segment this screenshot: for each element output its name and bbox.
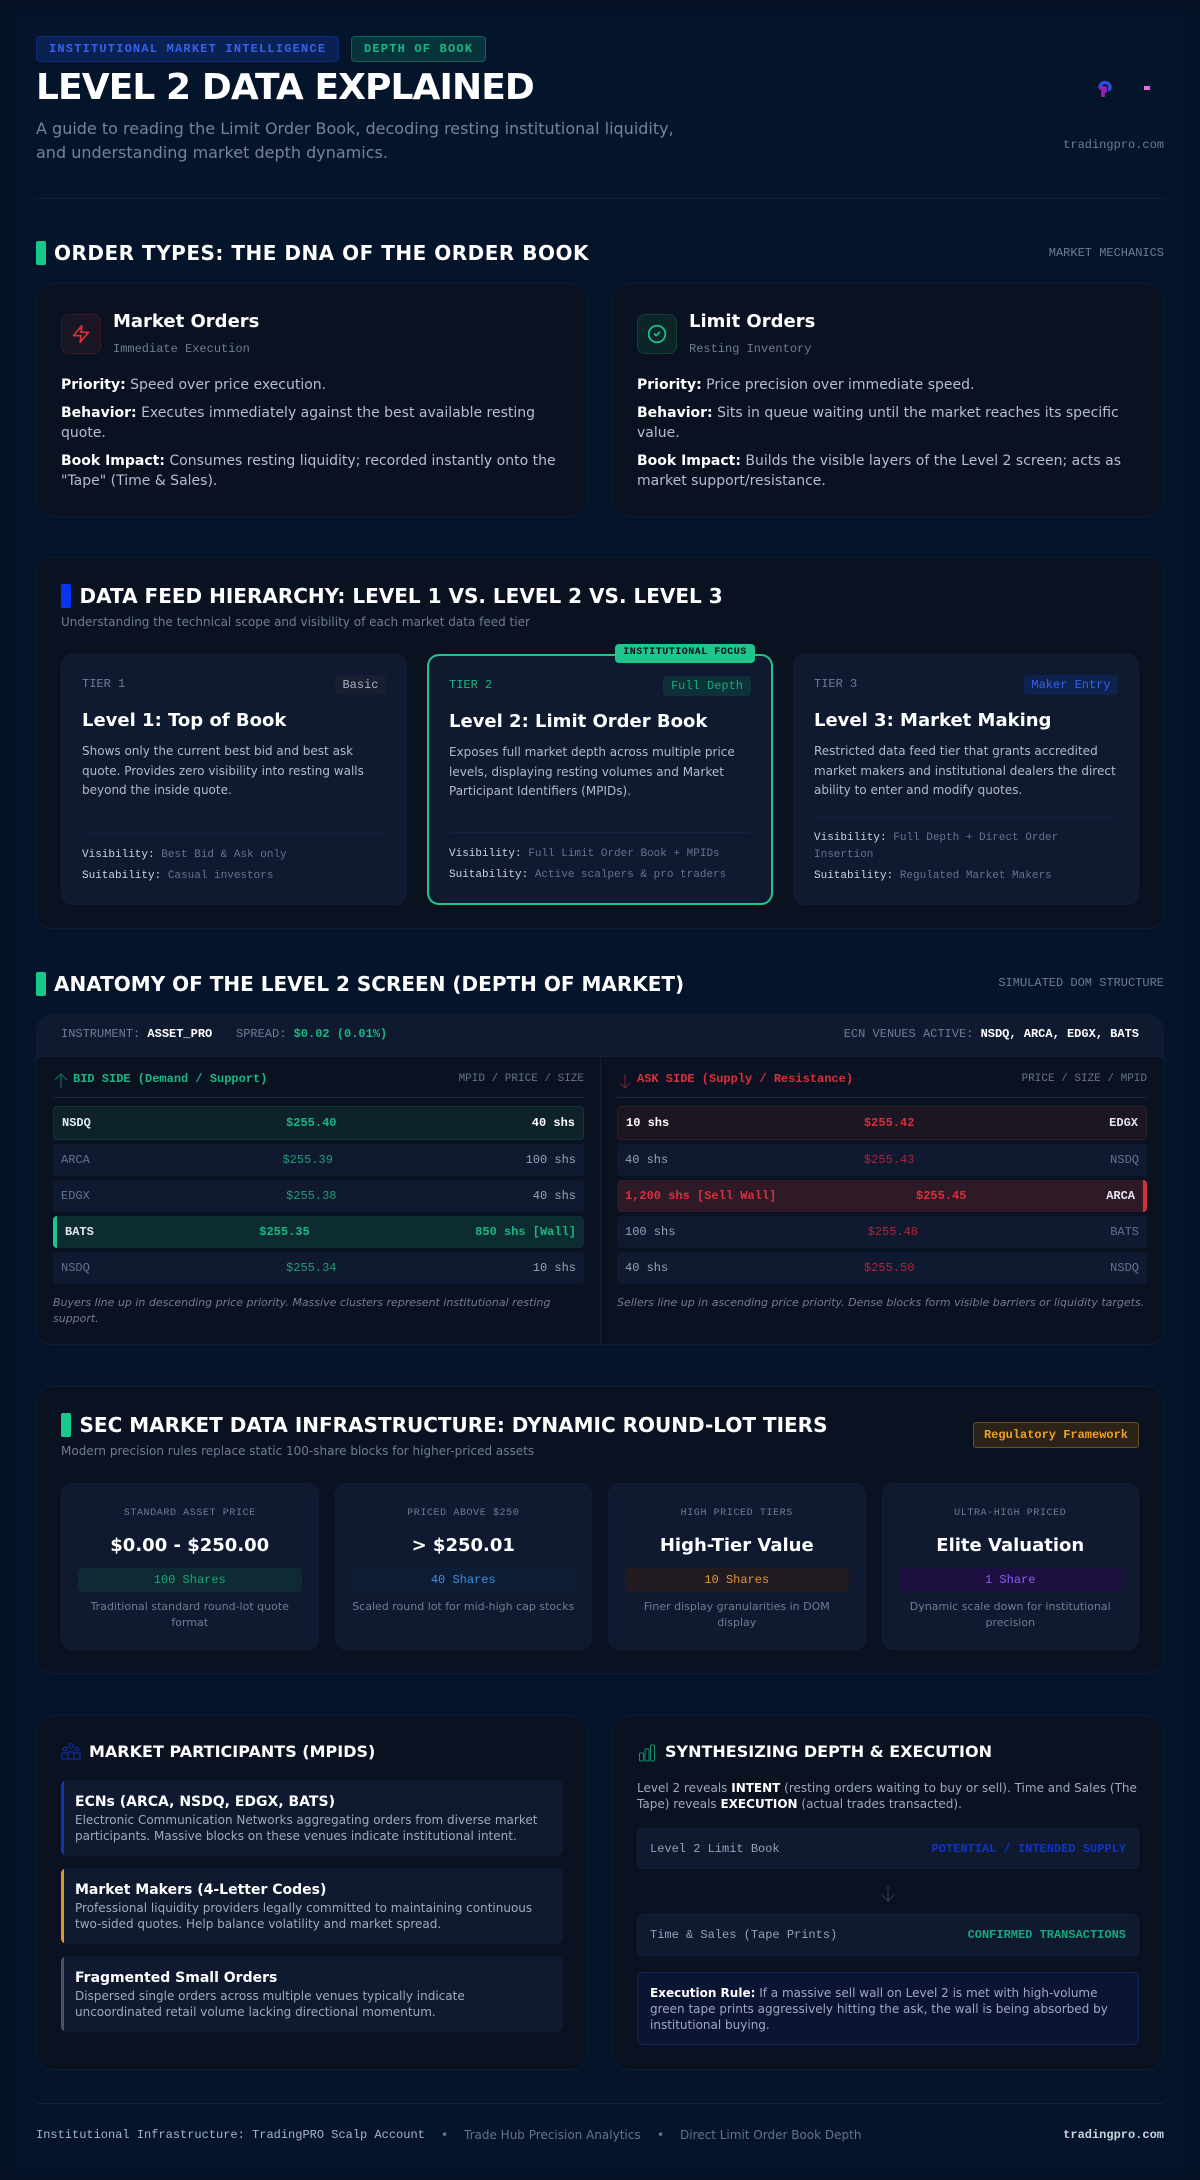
card subtitle: Resting Inventory (689, 342, 811, 356)
bid rows: 40 shs (532, 1116, 575, 1130)
panel: market orders: Behavior: Executes immediately against the best available resting (61, 405, 535, 421)
card: tier 2 (427, 654, 773, 905)
card: tier 1: Basic (342, 678, 378, 692)
card: ultra high: ULTRA-HIGH PRICED (954, 1508, 1066, 1519)
icon: check circle (637, 314, 677, 354)
card: tier 1: Visibility: Best Bid & Ask only (82, 849, 287, 861)
ask side: 40 shs (625, 1261, 668, 1275)
card: tier 3: Restricted data feed tier that grants accredited (814, 744, 1098, 758)
panel: market orders: Priority: Speed over price execution. (61, 377, 326, 393)
item: ecns: ECNs (ARCA, NSDQ, EDGX, BATS) (75, 1794, 335, 1810)
panel: depth of market (36, 1014, 1164, 1345)
ask side: PRICE / SIZE / MPID (1022, 1073, 1147, 1085)
panel: limit orders: Priority: Price precision over immediate speed. (637, 377, 974, 393)
ask rows: EDGX (1109, 1116, 1138, 1130)
bid side: BID SIDE (Demand / Support) (73, 1072, 267, 1086)
card: standard: Traditional standard round-lot quote (91, 1600, 289, 1613)
badge: institutional market intelligence (36, 36, 339, 62)
card: high tier: HIGH PRICED TIERS (681, 1508, 793, 1519)
card: tier 2: Suitability: Active scalpers & pro traders (449, 869, 726, 881)
card: tier 3 (793, 654, 1139, 905)
subtitle: A guide to reading the Limit Order Book, decoding resting institutional liquidity, (36, 119, 674, 138)
panel: market orders (36, 283, 588, 517)
title: LEVEL 2 DATA EXPLAINED (36, 67, 534, 108)
panel: limit orders: market support/resistance. (637, 473, 826, 489)
bid side: 850 shs [Wall] (475, 1225, 576, 1239)
bid side: 40 shs (533, 1189, 576, 1203)
card: tier 2: levels, displaying resting volumes and Market (449, 764, 724, 778)
ask side: NSDQ (1110, 1261, 1139, 1275)
item: fragmented orders: Fragmented Small Orders (75, 1970, 277, 1986)
card: tier 3: Level 3: Market Making (814, 710, 1051, 731)
subheading: Understanding the technical scope and visibility of each market data feed tier (61, 615, 530, 629)
ask rows: 10 shs (626, 1116, 669, 1130)
section heading: order types (36, 241, 1164, 265)
bid side: $255.39 (282, 1153, 333, 1167)
card: tier 1: beyond the inside quote. (82, 783, 232, 797)
panel: market orders: "Tape" (Time & Sales). (61, 473, 217, 489)
badge: regulatory framework (973, 1422, 1139, 1448)
section heading: anatomy: SIMULATED DOM STRUCTURE (998, 976, 1164, 990)
bid note: support. (53, 1312, 99, 1325)
item: ecns: Electronic Communication Networks aggregating orders from diverse market (75, 1813, 537, 1827)
card title: Market Orders (113, 311, 259, 332)
card: above 250: 40 Shares (431, 1573, 496, 1587)
bid side: 10 shs (533, 1261, 576, 1275)
card: tier 2: Participant Identifiers (MPIDs). (449, 784, 631, 798)
callout: execution rule (637, 1972, 1139, 2045)
card: high tier (608, 1483, 866, 1650)
callout: execution rule: green tape prints aggressively hitting the ask, the wall is being absorbed by (650, 2002, 1108, 2016)
icon: logo mark (1098, 80, 1112, 97)
card: above 250: PRICED ABOVE $250 (407, 1508, 519, 1519)
card: standard: format (171, 1616, 208, 1629)
callout: execution rule: Execution Rule: If a massive sell wall on Level 2 is met with high-volume (650, 1986, 1098, 2000)
panel: market participants (36, 1715, 588, 2070)
ask side: $255.45 (916, 1189, 966, 1203)
card: ultra high: Elite Valuation (936, 1535, 1084, 1556)
card: standard: STANDARD ASSET PRICE (124, 1508, 256, 1519)
card: tier 3: Suitability: Regulated Market Makers (814, 870, 1052, 882)
card: high tier: display (717, 1616, 756, 1629)
panel: market orders: quote. (61, 425, 106, 441)
heading: SYNTHESIZING DEPTH & EXECUTION (665, 1742, 992, 1761)
ask side: $255.48 (868, 1225, 918, 1239)
bid side: BATS (65, 1225, 94, 1239)
card: above 250 (334, 1483, 592, 1650)
ask side: 40 shs (625, 1153, 668, 1167)
item: fragmented orders (61, 1956, 563, 2032)
flow: time and sales: Time & Sales (Tape Prints) (650, 1928, 837, 1942)
bid rows (53, 1106, 584, 1140)
bid side: $255.34 (286, 1261, 336, 1275)
footer: tradingpro.com (1063, 2128, 1164, 2142)
icon: lightning (61, 314, 101, 354)
subheading: Modern precision rules replace static 100-share blocks for higher-priced assets (61, 1444, 534, 1458)
badge: institutional focus (615, 644, 755, 663)
icon: people (62, 1743, 80, 1760)
card: tier 1: quote. Provides zero visibility into resting walls (82, 764, 364, 778)
heading: MARKET PARTICIPANTS (MPIDS) (89, 1742, 375, 1761)
intro text: Tape) reveals EXECUTION (actual trades transacted). (637, 1797, 962, 1811)
bid side: 100 shs (526, 1153, 576, 1167)
icon: arrow down (620, 1074, 630, 1089)
item: fragmented orders: uncoordinated retail volume lacking directional momentum. (75, 2005, 436, 2019)
icon: arrow up (54, 1073, 68, 1088)
flow: level 2 limit book: POTENTIAL / INTENDED SUPPLY (932, 1842, 1126, 1856)
bid side: $255.38 (286, 1189, 336, 1203)
panel: limit orders: Book Impact: Builds the visible layers of the Level 2 screen; acts as (637, 453, 1121, 469)
item: market makers: Market Makers (4-Letter Codes) (75, 1882, 326, 1898)
header (36, 36, 1164, 162)
card: above 250: Scaled round lot for mid-high cap stocks (352, 1600, 574, 1613)
instrument bar: INSTRUMENT: ASSET_PRO (61, 1027, 212, 1041)
bid side: EDGX (61, 1189, 90, 1203)
section heading: order types: MARKET MECHANICS (1049, 246, 1164, 260)
heading: SEC MARKET DATA INFRASTRUCTURE: DYNAMIC ROUND-LOT TIERS (80, 1413, 827, 1437)
ask side: NSDQ (1110, 1153, 1139, 1167)
card: tier 3: Maker Entry (1031, 678, 1111, 692)
bid side: $255.35 (259, 1225, 310, 1239)
card: tier 3: Insertion (814, 849, 873, 861)
ask side: $255.43 (864, 1153, 914, 1167)
ask side: BATS (1110, 1225, 1139, 1239)
badge: institutional focus: INSTITUTIONAL FOCUS (623, 647, 747, 658)
card: tier 3: ability to enter and modify quotes. (814, 783, 1022, 797)
card: tier 2: TIER 2 (449, 678, 492, 692)
card: high tier: 10 Shares (704, 1573, 769, 1587)
ask rows (617, 1106, 1147, 1140)
footer: • (441, 2128, 448, 2142)
panel: synthesizing depth and execution (612, 1715, 1164, 2070)
bid side: MPID / PRICE / SIZE (459, 1073, 584, 1085)
card: tier 2: Level 2: Limit Order Book (449, 711, 707, 732)
card: tier 3: Visibility: Full Depth + Direct Order (814, 832, 1058, 844)
section heading: order types: ORDER TYPES: THE DNA OF THE ORDER BOOK (54, 241, 589, 265)
instrument bar (36, 1014, 1164, 1057)
badge: institutional market intelligence: INSTITUTIONAL MARKET INTELLIGENCE (49, 42, 326, 56)
card: standard: 100 Shares (154, 1573, 226, 1587)
card: ultra high (882, 1483, 1139, 1650)
card subtitle: Immediate Execution (113, 342, 250, 356)
instrument bar: ECN VENUES ACTIVE: NSDQ, ARCA, EDGX, BATS (844, 1027, 1139, 1041)
panel: limit orders: Behavior: Sits in queue waiting until the market reaches its specific (637, 405, 1119, 421)
panel: limit orders: value. (637, 425, 680, 441)
card: ultra high: precision (985, 1616, 1035, 1629)
ask side (617, 1072, 1147, 1309)
card: tier 2: Visibility: Full Limit Order Book + MPIDs (449, 848, 720, 860)
card: tier 2: Exposes full market depth across multiple price (449, 745, 735, 759)
flow: time and sales: CONFIRMED TRANSACTIONS (968, 1928, 1126, 1942)
website label: tradingpro.com (1063, 138, 1164, 152)
section heading: anatomy: ANATOMY OF THE LEVEL 2 SCREEN (DEPTH OF MARKET) (54, 972, 684, 996)
footer: Trade Hub Precision Analytics (464, 2128, 641, 2142)
bid note: Buyers line up in descending price priority. Massive clusters represent institutional resting (53, 1296, 550, 1309)
section heading: anatomy (36, 972, 1164, 996)
card body (637, 377, 1121, 489)
badge: regulatory framework: Regulatory Framework (984, 1428, 1128, 1442)
bid rows: NSDQ (62, 1116, 91, 1130)
subtitle (36, 119, 674, 162)
subtitle: and understanding market depth dynamics. (36, 143, 388, 162)
card: high tier: High-Tier Value (660, 1535, 814, 1556)
item: fragmented orders: Dispersed single orders across multiple venues typically indicate (75, 1989, 465, 2003)
panel: sec round-lot tiers (36, 1386, 1164, 1674)
item: market makers: two-sided quotes. Help balance volatility and market spread. (75, 1917, 441, 1931)
bid note (53, 1296, 550, 1325)
card title: Limit Orders (689, 311, 815, 332)
arrow: flow down (882, 1886, 894, 1902)
instrument bar: SPREAD: $0.02 (0.01%) (236, 1027, 387, 1041)
card: standard (61, 1483, 318, 1650)
callout: execution rule: institutional buying. (650, 2018, 770, 2032)
item: market makers: Professional liquidity providers legally committed to maintaining continuous (75, 1901, 532, 1915)
panel: limit orders (612, 283, 1164, 517)
bid side: ARCA (61, 1153, 90, 1167)
panel: data feed hierarchy (36, 557, 1164, 929)
card: tier 1 (61, 654, 407, 905)
ask side: ASK SIDE (Supply / Resistance) (637, 1072, 853, 1086)
card: tier 1: Suitability: Casual investors (82, 870, 273, 882)
card: above 250: > $250.01 (412, 1535, 515, 1556)
heading: DATA FEED HIERARCHY: LEVEL 1 VS. LEVEL 2 VS. LEVEL 3 (80, 584, 723, 608)
ask side: $255.50 (864, 1261, 914, 1275)
icon: logo dot (1144, 86, 1150, 90)
card: tier 3: TIER 3 (814, 677, 857, 691)
footer: Direct Limit Order Book Depth (680, 2128, 861, 2142)
badge: depth of book (351, 36, 486, 62)
item: ecns (61, 1780, 563, 1856)
footer (36, 2128, 1164, 2142)
flow: level 2 limit book: Level 2 Limit Book (650, 1842, 780, 1856)
ask note: Sellers line up in ascending price priority. Dense blocks form visible barriers or liquidity targets. (617, 1296, 1144, 1309)
flow: level 2 limit book (637, 1828, 1139, 1869)
intro text: Level 2 reveals INTENT (resting orders waiting to buy or sell). Time and Sales (The (637, 1781, 1137, 1795)
ask side: ARCA (1106, 1189, 1135, 1203)
item: market makers (61, 1868, 563, 1944)
card: tier 1: Shows only the current best bid and best ask (82, 744, 353, 758)
card: standard: $0.00 - $250.00 (110, 1535, 269, 1556)
ask rows: $255.42 (864, 1116, 914, 1130)
ask side: 100 shs (625, 1225, 675, 1239)
flow: time and sales (637, 1914, 1139, 1956)
card: ultra high: 1 Share (985, 1573, 1035, 1587)
ask side: 1,200 shs [Sell Wall] (625, 1189, 776, 1203)
bid side (53, 1072, 584, 1325)
card body (61, 377, 556, 489)
bid rows: $255.40 (286, 1116, 336, 1130)
footer: Institutional Infrastructure: TradingPRO Scalp Account (36, 2128, 425, 2142)
panel: market orders: Book Impact: Consumes resting liquidity; recorded instantly onto the (61, 453, 556, 469)
card: high tier: Finer display granularities in DOM (644, 1600, 830, 1613)
badge: depth of book: DEPTH OF BOOK (364, 42, 473, 56)
icon: bars (639, 1744, 655, 1762)
card: tier 2: Full Depth (671, 679, 743, 693)
bid side: NSDQ (61, 1261, 90, 1275)
item: ecns: participants. Massive blocks on these venues indicate institutional intent. (75, 1829, 517, 1843)
intro text (636, 1781, 1137, 1811)
card: tier 1: Level 1: Top of Book (82, 710, 286, 731)
footer: • (657, 2128, 664, 2142)
card: tier 3: market makers and institutional dealers the direct (814, 764, 1116, 778)
card: ultra high: Dynamic scale down for institutional (910, 1600, 1111, 1613)
card: tier 1: TIER 1 (82, 677, 125, 691)
